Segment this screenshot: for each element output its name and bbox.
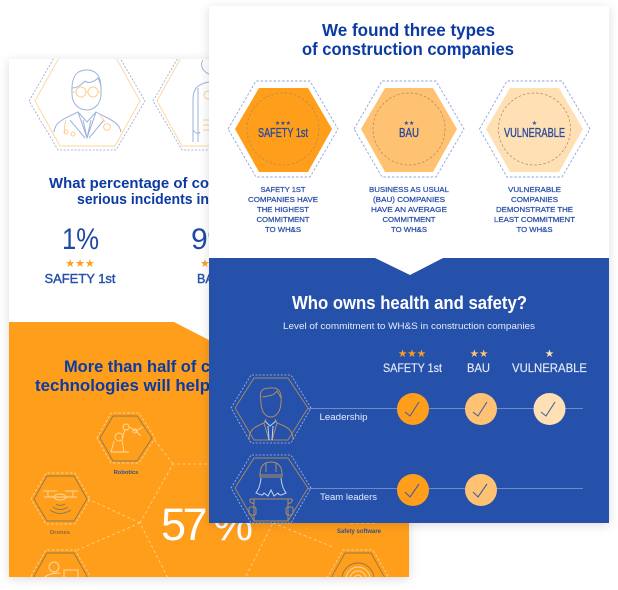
front panel (209, 6, 609, 523)
stat: safety 1st 1% (44, 228, 116, 284)
badge: vulnerable (480, 81, 590, 177)
text: BAU description: BUSINESS AS USUAL (369, 185, 449, 194)
text: safety 1st description (248, 185, 318, 234)
text: vulnerable description: LEAST COMMITMENT (494, 215, 575, 224)
icon: sensor target (327, 550, 388, 577)
badge: safety 1st (228, 81, 338, 177)
column: safety 1st: SAFETY 1st (383, 363, 443, 375)
column: BAU: ★★ (470, 348, 488, 360)
badge: BAU: ★★ (404, 120, 414, 127)
row: team leaders (231, 455, 583, 523)
column: BAU: BAU (467, 363, 490, 375)
badge: vulnerable: ★ (532, 120, 537, 127)
check: vulnerable (534, 393, 566, 425)
text: safety 1st description: COMPANIES HAVE (248, 195, 318, 204)
text: BAU description: TO WH&S (391, 225, 427, 234)
heading: three types: of construction companies (302, 39, 514, 59)
column: vulnerable: ★ (545, 348, 554, 360)
heading: technologies (35, 357, 210, 395)
text: BAU description: HAVE AN AVERAGE (371, 205, 447, 214)
heading: technologies: More than half of c (64, 357, 210, 376)
icon: leader (231, 375, 311, 443)
column: safety 1st (383, 348, 443, 375)
stat: safety 1st 1%: 1% (62, 223, 99, 256)
check: BAU (465, 393, 497, 425)
text: vulnerable description: COMPANIES (511, 195, 558, 204)
column: safety 1st: ★★★ (398, 348, 426, 360)
stat: BAU 9%: 9% (191, 223, 234, 256)
check: safety 1st (397, 474, 429, 506)
icon: doctor hexagon (29, 51, 145, 150)
column: vulnerable: VULNERABLE (512, 363, 587, 375)
panel: who owns health and safety (209, 258, 609, 523)
subheading: Level of commitment to WH&S in construction companies (283, 321, 535, 331)
heading: three types (302, 20, 514, 59)
text: safety 1st description: THE HIGHEST (257, 205, 309, 214)
panel: orange technologies section (9, 322, 409, 590)
check: safety 1st (397, 393, 429, 425)
text: vulnerable description (494, 185, 575, 234)
badge: BAU (354, 81, 464, 177)
label: team leaders: Team leaders (320, 492, 378, 502)
stat: BAU 9%: ★★ (200, 257, 220, 270)
icon: robotics (97, 413, 155, 463)
label: robotics: Robotics (114, 470, 138, 476)
stat: BAU 9% (192, 228, 209, 284)
label: leadership: Leadership (320, 412, 368, 422)
heading: three types: We found three types (322, 20, 495, 40)
heading: who owns: Who owns health and safety? (292, 293, 527, 313)
label: safety software: Safety software (337, 529, 382, 535)
badge: vulnerable: VULNERABLE (504, 125, 565, 140)
text: BAU description (369, 185, 449, 234)
column: BAU (467, 348, 490, 375)
icon: wearable camera (30, 550, 90, 577)
icon: team leader (231, 455, 311, 523)
stat: safety 1st 1%: SAFETY 1st (44, 272, 116, 286)
big number 57%: 57 % (161, 499, 253, 550)
text: safety 1st description: SAFETY 1ST (260, 185, 306, 194)
text: BAU description: COMMITMENT (382, 215, 436, 224)
badge: BAU: BAU (399, 125, 419, 140)
icon: safety software hexagon top (350, 523, 375, 524)
badge: safety 1st: ★★★ (275, 120, 291, 127)
text: vulnerable description: VULNERABLE (508, 185, 561, 194)
badge: safety 1st: SAFETY 1st (258, 125, 308, 140)
back panel (9, 51, 409, 590)
text: safety 1st description: TO WH&S (265, 225, 301, 234)
check: BAU (465, 474, 497, 506)
text: BAU description: (BAU) COMPANIES (373, 195, 445, 204)
stat: BAU 9%: BAU (197, 272, 223, 286)
dashed hub hexagon and connectors (75, 438, 333, 582)
column: vulnerable (512, 348, 587, 375)
heading: percentage question: What percentage of co (49, 176, 209, 192)
icon: second worker hexagon (152, 59, 209, 150)
icon: drones (31, 473, 90, 524)
heading: percentage question (49, 177, 208, 204)
stat: safety 1st 1%: ★★★ (65, 257, 95, 270)
text: vulnerable description: DEMONSTRATE THE (496, 205, 573, 214)
heading: technologies: technologies will help (35, 376, 210, 395)
text: safety 1st description: COMMITMENT (256, 215, 310, 224)
label: drones: Drones (50, 530, 70, 536)
text: vulnerable description: TO WH&S (516, 225, 552, 234)
heading: percentage question: serious incidents in (77, 192, 209, 208)
row: leadership (231, 375, 583, 443)
